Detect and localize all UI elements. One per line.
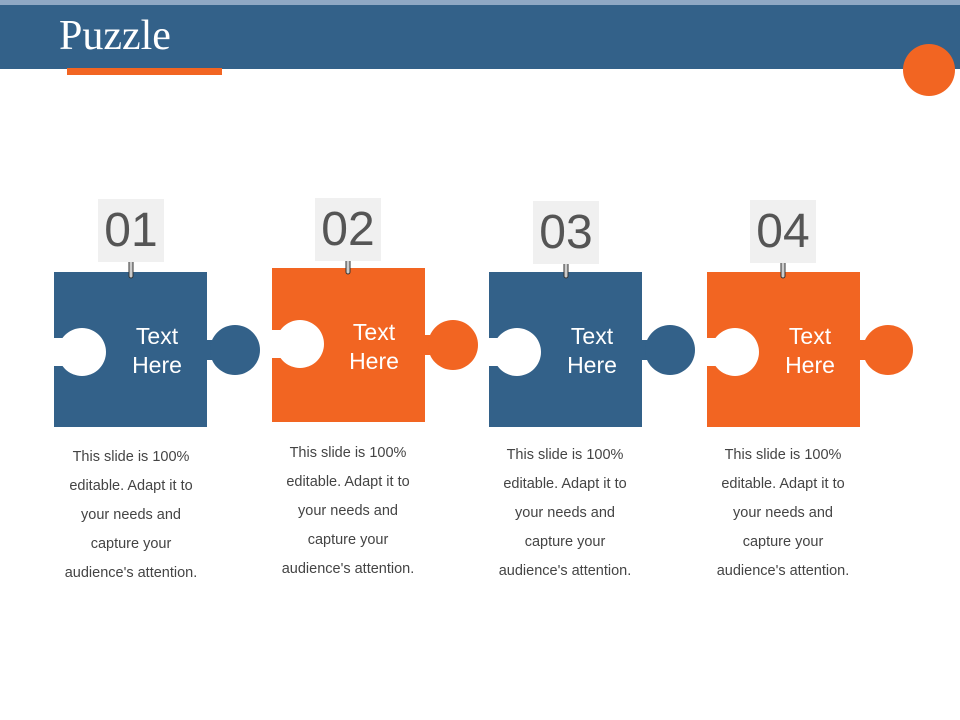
label 3: Here (567, 352, 617, 378)
label 2 (349, 319, 399, 374)
decorative circle (903, 44, 955, 96)
number 01 (98, 199, 164, 262)
description 1: editable. Adapt it to (69, 478, 193, 494)
description 3: audience's attention. (499, 563, 631, 579)
description 2: This slide is 100% (290, 445, 406, 461)
description 3 (499, 447, 631, 579)
description 2: capture your (308, 532, 388, 548)
number 02: 02 (321, 203, 375, 256)
label 2: Text (353, 319, 395, 345)
number 04 (750, 200, 816, 263)
number 02 (315, 198, 381, 261)
label 1: Here (132, 352, 182, 378)
title: Puzzle (59, 13, 171, 59)
title underline (67, 68, 222, 75)
label 4 (785, 323, 835, 378)
description 1: This slide is 100% (73, 449, 189, 465)
description 1 (65, 449, 197, 581)
description 4: This slide is 100% (725, 447, 841, 463)
number 04: 04 (756, 205, 810, 258)
pins (129, 252, 785, 278)
description 2 (282, 445, 414, 577)
description 4: editable. Adapt it to (721, 476, 845, 492)
label 3: Text (571, 323, 613, 349)
description 2: editable. Adapt it to (286, 474, 410, 490)
description 4 (717, 447, 849, 579)
header bar (0, 0, 960, 69)
piece 2 (271, 268, 478, 422)
description 3: This slide is 100% (507, 447, 623, 463)
description 4: your needs and (733, 505, 833, 521)
piece 4 (706, 272, 913, 427)
description 1: your needs and (81, 507, 181, 523)
description 4: audience's attention. (717, 563, 849, 579)
label 1 (132, 323, 182, 378)
number 03 (533, 201, 599, 264)
description 1: audience's attention. (65, 565, 197, 581)
description 1: capture your (91, 536, 171, 552)
description 2: your needs and (298, 503, 398, 519)
description 4: capture your (743, 534, 823, 550)
description 3: capture your (525, 534, 605, 550)
description 3: editable. Adapt it to (503, 476, 627, 492)
label 4: Text (789, 323, 831, 349)
number 03: 03 (539, 206, 593, 259)
label 3 (567, 323, 617, 378)
description 3: your needs and (515, 505, 615, 521)
label 2: Here (349, 348, 399, 374)
label 4: Here (785, 352, 835, 378)
number 01: 01 (104, 204, 158, 257)
description 2: audience's attention. (282, 561, 414, 577)
piece 3 (488, 272, 695, 427)
piece 1 (53, 272, 260, 427)
label 1: Text (136, 323, 178, 349)
